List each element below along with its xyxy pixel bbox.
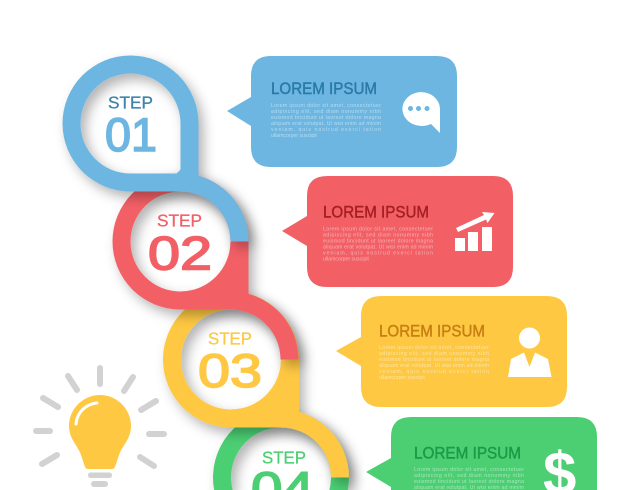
icon: bulb highlight [76, 403, 97, 424]
step 3 ring [163, 292, 349, 478]
step 4 ring [213, 409, 349, 490]
body text: aliquam erat volutpat. Ut wisi enim ad minim [323, 244, 433, 250]
body text: Lorem ipsum dolor sit amet, consectetuer [414, 467, 524, 473]
step 3 label [198, 328, 262, 397]
body text: euismod tincidunt ut laoreet dolore magna [414, 479, 524, 485]
body text: adipiscing elit, sed diam nonummy nibh [379, 351, 489, 357]
body text: ullamcorper suscipit [271, 133, 317, 139]
body text [323, 226, 433, 262]
body text: aliquam erat volutpat. Ut wisi enim ad minim [379, 363, 489, 369]
body text: Lorem ipsum dolor sit amet, consectetuer [379, 345, 489, 351]
body text: euismod tincidunt ut laoreet dolore magna [323, 238, 433, 244]
panel: red callout [282, 176, 513, 287]
icon: bulb glass [69, 395, 131, 469]
body text [271, 103, 381, 139]
panel: green callout [366, 417, 597, 490]
light bulb with rays [36, 368, 164, 487]
panel: blue callout [227, 56, 457, 167]
body text: Lorem ipsum dolor sit amet, consectetuer [323, 226, 433, 232]
heading: LOREM IPSUM [271, 80, 377, 98]
step 2 ring [112, 174, 298, 360]
step 1 label: 01 [105, 108, 157, 161]
heading: LOREM IPSUM [323, 204, 429, 222]
body text: ullamcorper suscipit [323, 256, 369, 262]
body text: adipiscing elit, sed diam nonummy nibh [271, 109, 381, 115]
body text: adipiscing elit, sed diam nonummy nibh [414, 473, 524, 479]
panel: yellow callout [336, 296, 567, 407]
body text: veniam, quis nostrud exerci tation [379, 369, 489, 375]
step 3 label: 03 [198, 344, 262, 397]
bubble shape [336, 296, 567, 407]
body text: euismod tincidunt ut laoreet dolore magna [379, 357, 489, 363]
body text: ullamcorper suscipit [379, 375, 425, 381]
heading: LOREM IPSUM [379, 322, 485, 340]
body text: veniam, quis nostrud exerci tation [323, 250, 433, 256]
body text: euismod tincidunt ut laoreet dolore magna [271, 115, 381, 121]
icon: speech bubble [402, 92, 440, 133]
icon: person [508, 328, 552, 377]
step 2 label [148, 210, 212, 280]
step 1 label: STEP [108, 92, 153, 112]
step 2 label: STEP [157, 210, 202, 230]
body text: veniam, quis nostrud exerci tation [271, 127, 381, 133]
body text [379, 345, 489, 381]
body text: aliquam erat volutpat. Ut wisi enim ad minim [271, 121, 381, 127]
icon: growth chart [455, 212, 494, 251]
icon: rays [36, 368, 164, 466]
step 2 label: 02 [148, 226, 212, 280]
bubble shape [227, 56, 457, 167]
step 1 ring [62, 56, 248, 242]
icon: bulb base [88, 472, 112, 487]
body text: Lorem ipsum dolor sit amet, consectetuer [271, 103, 381, 109]
step 3 label: STEP [208, 328, 252, 348]
bubble shape [282, 176, 513, 287]
body text: adipiscing elit, sed diam nonummy nibh [323, 232, 433, 238]
step 4 label [251, 448, 314, 490]
bubble shape [366, 417, 597, 490]
heading: LOREM IPSUM [414, 444, 521, 462]
body text [414, 467, 524, 490]
step 4 label: STEP [262, 448, 306, 468]
